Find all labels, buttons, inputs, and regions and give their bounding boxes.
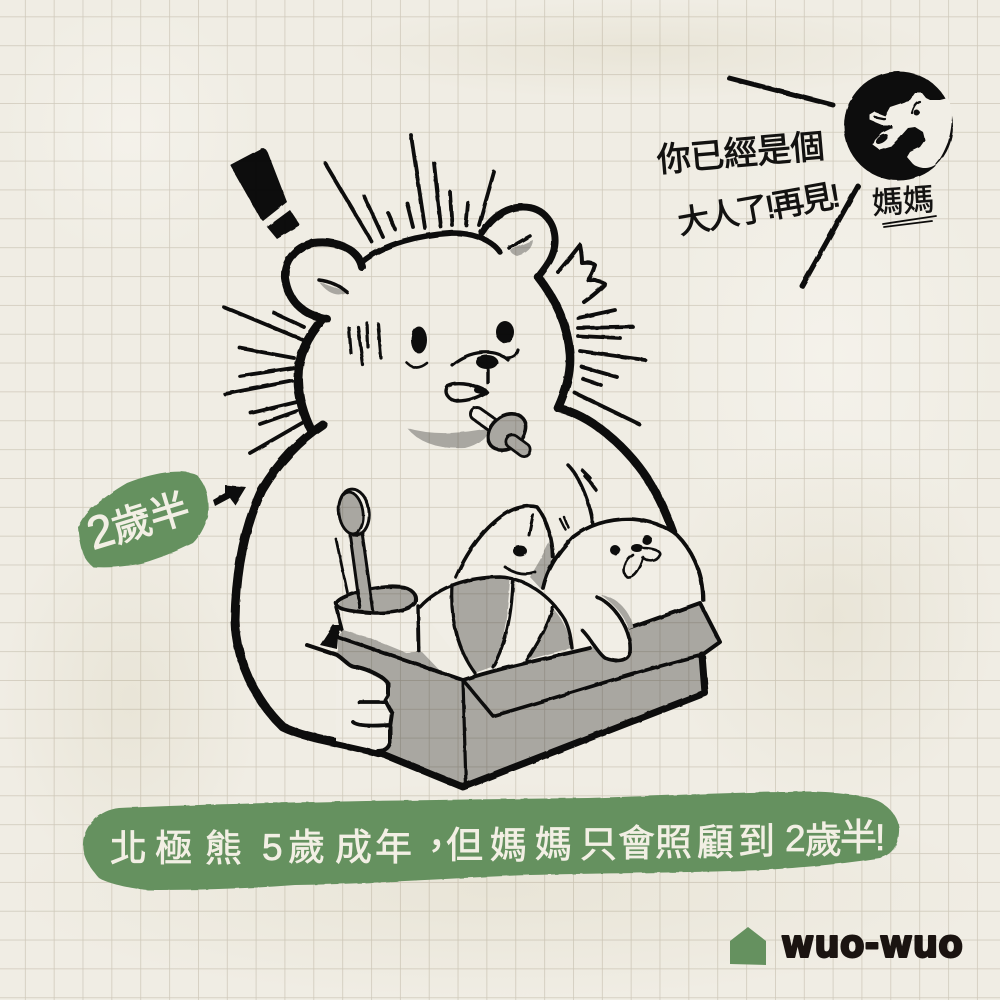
mother speech text: 大人了!再見! xyxy=(675,177,843,241)
mother label: 媽媽 xyxy=(871,182,935,221)
age tag: 2歲半: 2歲半 xyxy=(81,479,195,560)
ears xyxy=(319,236,533,294)
mother speech text xyxy=(655,127,843,241)
beach ball xyxy=(420,577,572,680)
illustration: polar bear with moving box xyxy=(224,135,720,787)
mother speech text: 你已經是個 xyxy=(655,127,826,180)
cardboard box xyxy=(338,603,720,787)
cheek marks xyxy=(349,323,381,365)
bottom banner xyxy=(83,792,899,890)
logo: wuo-wuo xyxy=(781,922,963,966)
toy fish xyxy=(456,506,568,590)
cup with spoon xyxy=(336,487,419,663)
mother avatar xyxy=(844,72,953,180)
surprise rays xyxy=(224,135,645,453)
speech lines xyxy=(729,78,858,286)
seal toy xyxy=(541,519,703,650)
bottom banner: 北極熊5歲成年，但媽媽只會照顧到2歲半! xyxy=(110,817,885,869)
chin shadow xyxy=(407,428,490,448)
pacifier xyxy=(477,406,533,458)
seal flipper xyxy=(582,595,634,660)
age tag: 2歲半 xyxy=(78,472,209,567)
bear hand xyxy=(307,625,392,751)
arm line xyxy=(568,465,596,525)
exclamation mark xyxy=(230,148,300,239)
face xyxy=(407,321,518,401)
arrow to age tag xyxy=(213,485,246,506)
bear outline xyxy=(235,207,673,753)
